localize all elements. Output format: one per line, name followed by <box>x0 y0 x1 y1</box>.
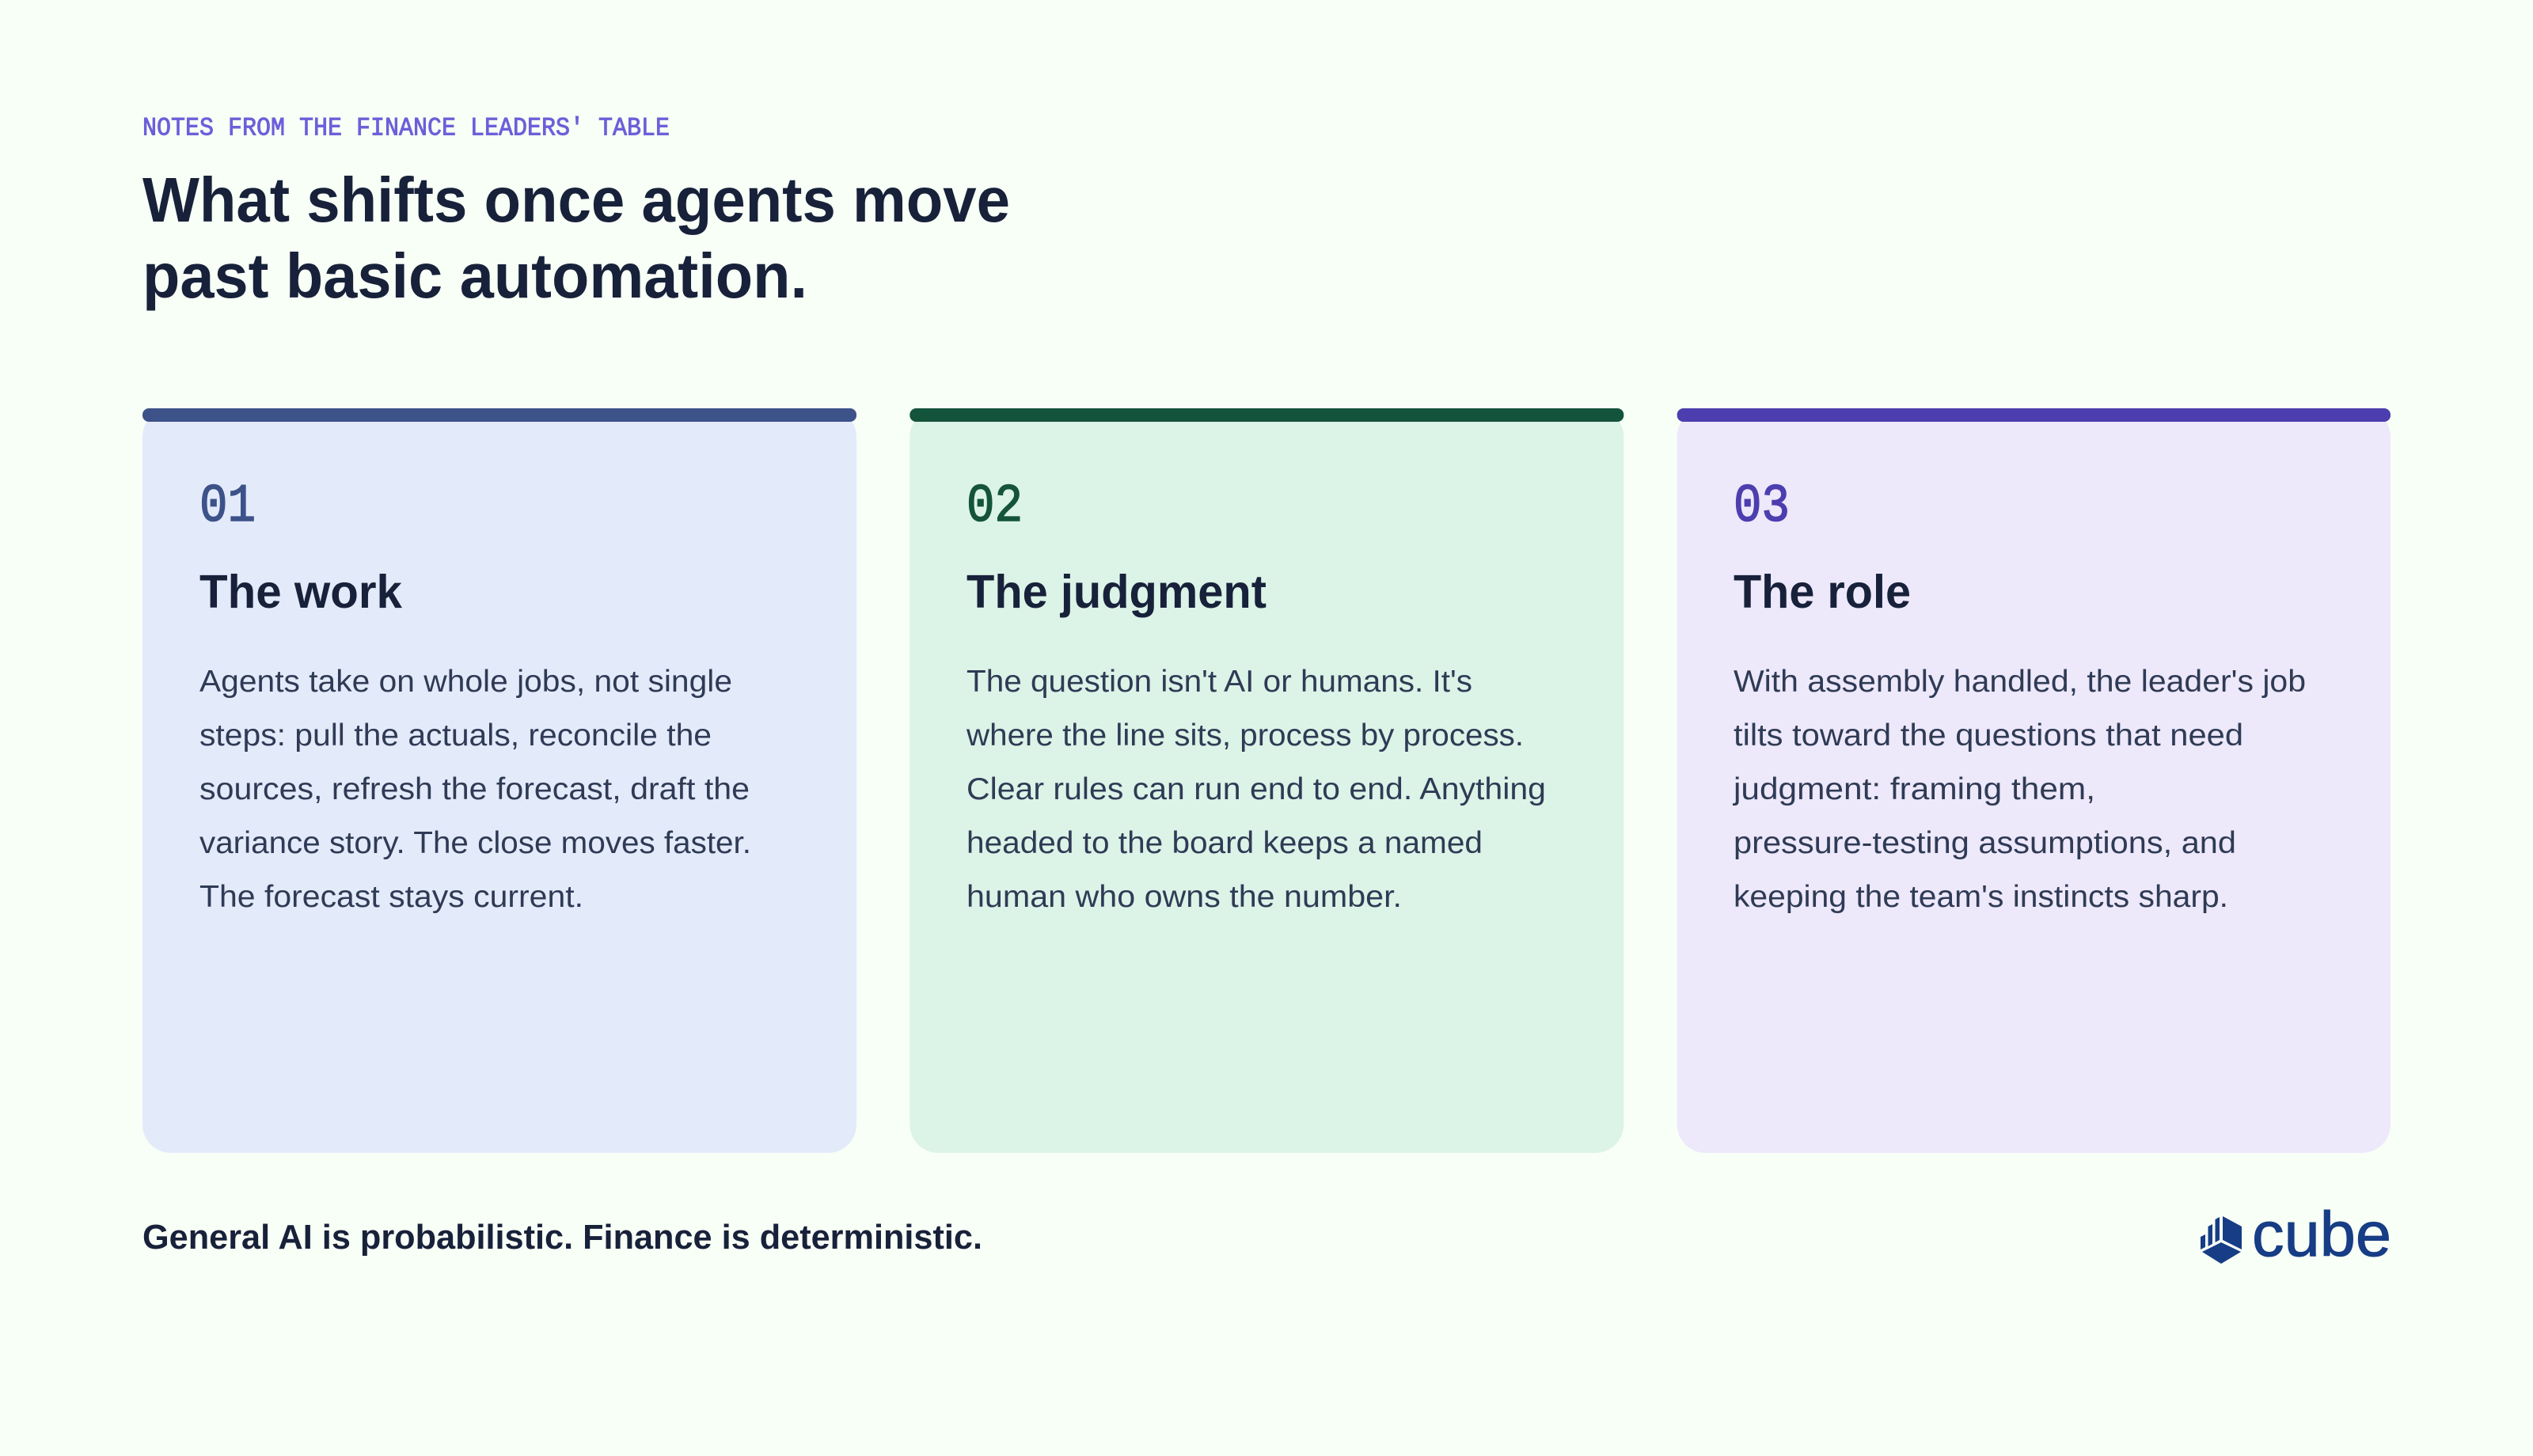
body text: the work: variance story. The close moves faster. <box>199 826 751 860</box>
panel: the work <box>142 408 856 1153</box>
wordmark: cube <box>2252 1199 2391 1269</box>
body text: the judgment: human who owns the number. <box>966 880 1402 914</box>
body text: the role <box>1733 665 2306 914</box>
body text: the judgment: The question isn't AI or humans. It's <box>966 665 1472 699</box>
panel: the role <box>1677 408 2391 1153</box>
body text: the role: With assembly handled, the leader's job <box>1734 665 2306 699</box>
body text: the role: keeping the team's instincts sharp. <box>1734 880 2228 914</box>
body text: the judgment: headed to the board keeps a named <box>966 826 1483 860</box>
title <box>142 165 1010 311</box>
icon: cube mark <box>2201 1216 2242 1264</box>
footer statement: General AI is probabilistic. Finance is deterministic. <box>142 1218 982 1257</box>
body text: the work: Agents take on whole jobs, not single <box>199 665 732 699</box>
body text: the judgment: Clear rules can run end to end. Anything <box>966 772 1546 806</box>
logo: cube <box>2201 1199 2391 1269</box>
body text: the role: pressure-testing assumptions, and <box>1734 826 2236 860</box>
eyebrow label: NOTES FROM THE FINANCE LEADERS' TABLE <box>142 114 670 142</box>
body text: the work: The forecast stays current. <box>199 880 583 914</box>
number 01: 01 <box>199 476 256 537</box>
title: What shifts once agents move <box>142 165 1010 235</box>
panel: the judgment <box>910 408 1623 1153</box>
body text: the work <box>199 665 751 914</box>
body text: the work: steps: pull the actuals, reconcile the <box>199 719 712 753</box>
number 03: 03 <box>1734 476 1790 537</box>
body text: the judgment <box>966 665 1546 914</box>
heading: the role: The role <box>1734 566 1911 618</box>
number 02: 02 <box>966 476 1023 537</box>
body text: the work: sources, refresh the forecast, draft the <box>199 772 750 806</box>
body text: the role: judgment: framing them, <box>1733 772 2095 806</box>
body text: the judgment: where the line sits, process by process. <box>966 719 1524 753</box>
heading: the work: The work <box>199 566 402 618</box>
body text: the role: tilts toward the questions that need <box>1734 719 2243 753</box>
heading: the judgment: The judgment <box>966 566 1266 618</box>
title: past basic automation. <box>142 241 807 311</box>
